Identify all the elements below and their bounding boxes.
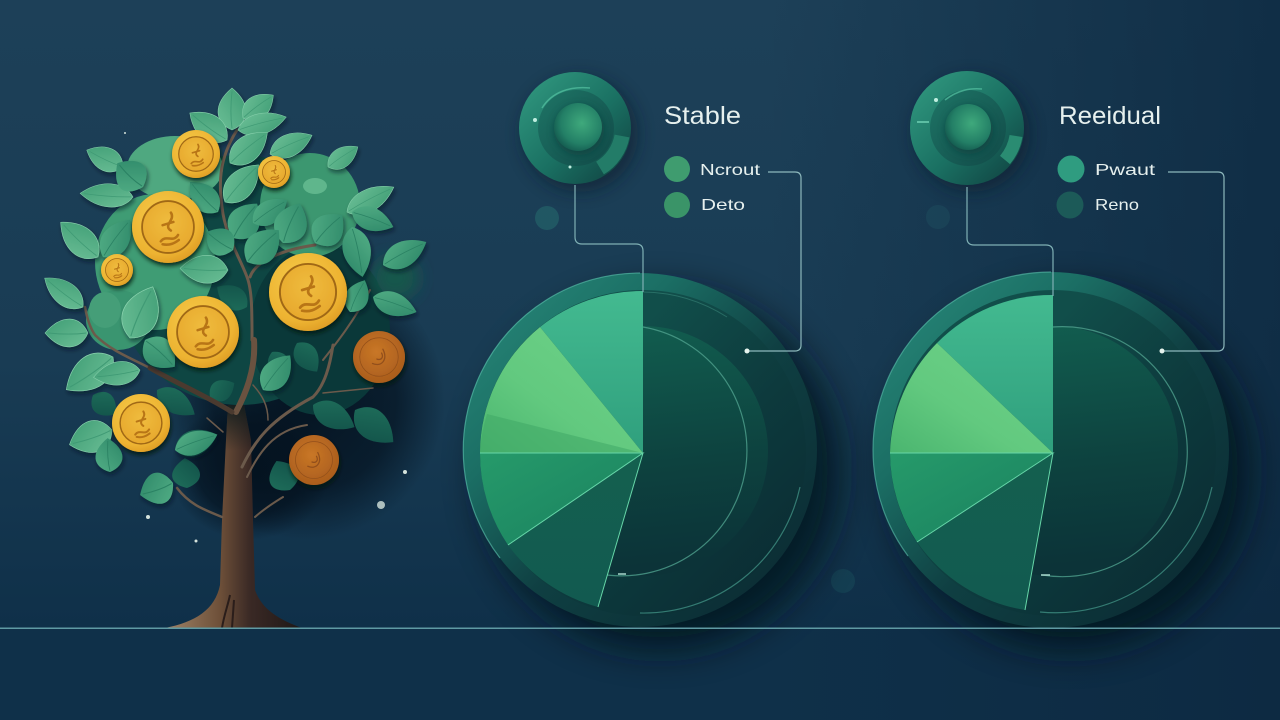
green leaves [38, 86, 432, 510]
tree illustration [38, 86, 445, 628]
trunk and branches [85, 130, 373, 628]
pie chart: stable [463, 273, 840, 650]
medallion dial [519, 72, 638, 192]
connector: legend to pie [744, 172, 801, 354]
connector: dial to pie [967, 187, 1053, 296]
legend item: Pwaut: Pwaut [1095, 162, 1156, 179]
legend item: Deto: Deto [701, 197, 745, 214]
faint decorative dots [535, 205, 950, 593]
legend item: Ncrout [664, 156, 761, 182]
heading: Stable [664, 102, 741, 130]
floating sparkles [124, 132, 407, 542]
connector: legend to pie [1160, 172, 1224, 354]
pie chart: residual [873, 272, 1250, 650]
heading: Reeidual [1059, 102, 1161, 130]
canopy foliage mass [86, 136, 419, 415]
panel: residual [873, 71, 1250, 650]
legend item: Deto [664, 192, 745, 218]
medallion dial [910, 71, 1030, 192]
panel: stable [463, 72, 840, 650]
legend item: Pwaut [1058, 156, 1156, 182]
connector: dial to pie [575, 185, 643, 292]
gold and copper coins [101, 130, 405, 485]
legend item: Ncrout: Ncrout [700, 162, 761, 179]
dark leaves [86, 277, 403, 496]
legend item: Reno [1056, 192, 1139, 218]
legend item: Reno: Reno [1095, 197, 1139, 214]
ground line [0, 628, 1280, 629]
tree shadow [165, 260, 445, 540]
